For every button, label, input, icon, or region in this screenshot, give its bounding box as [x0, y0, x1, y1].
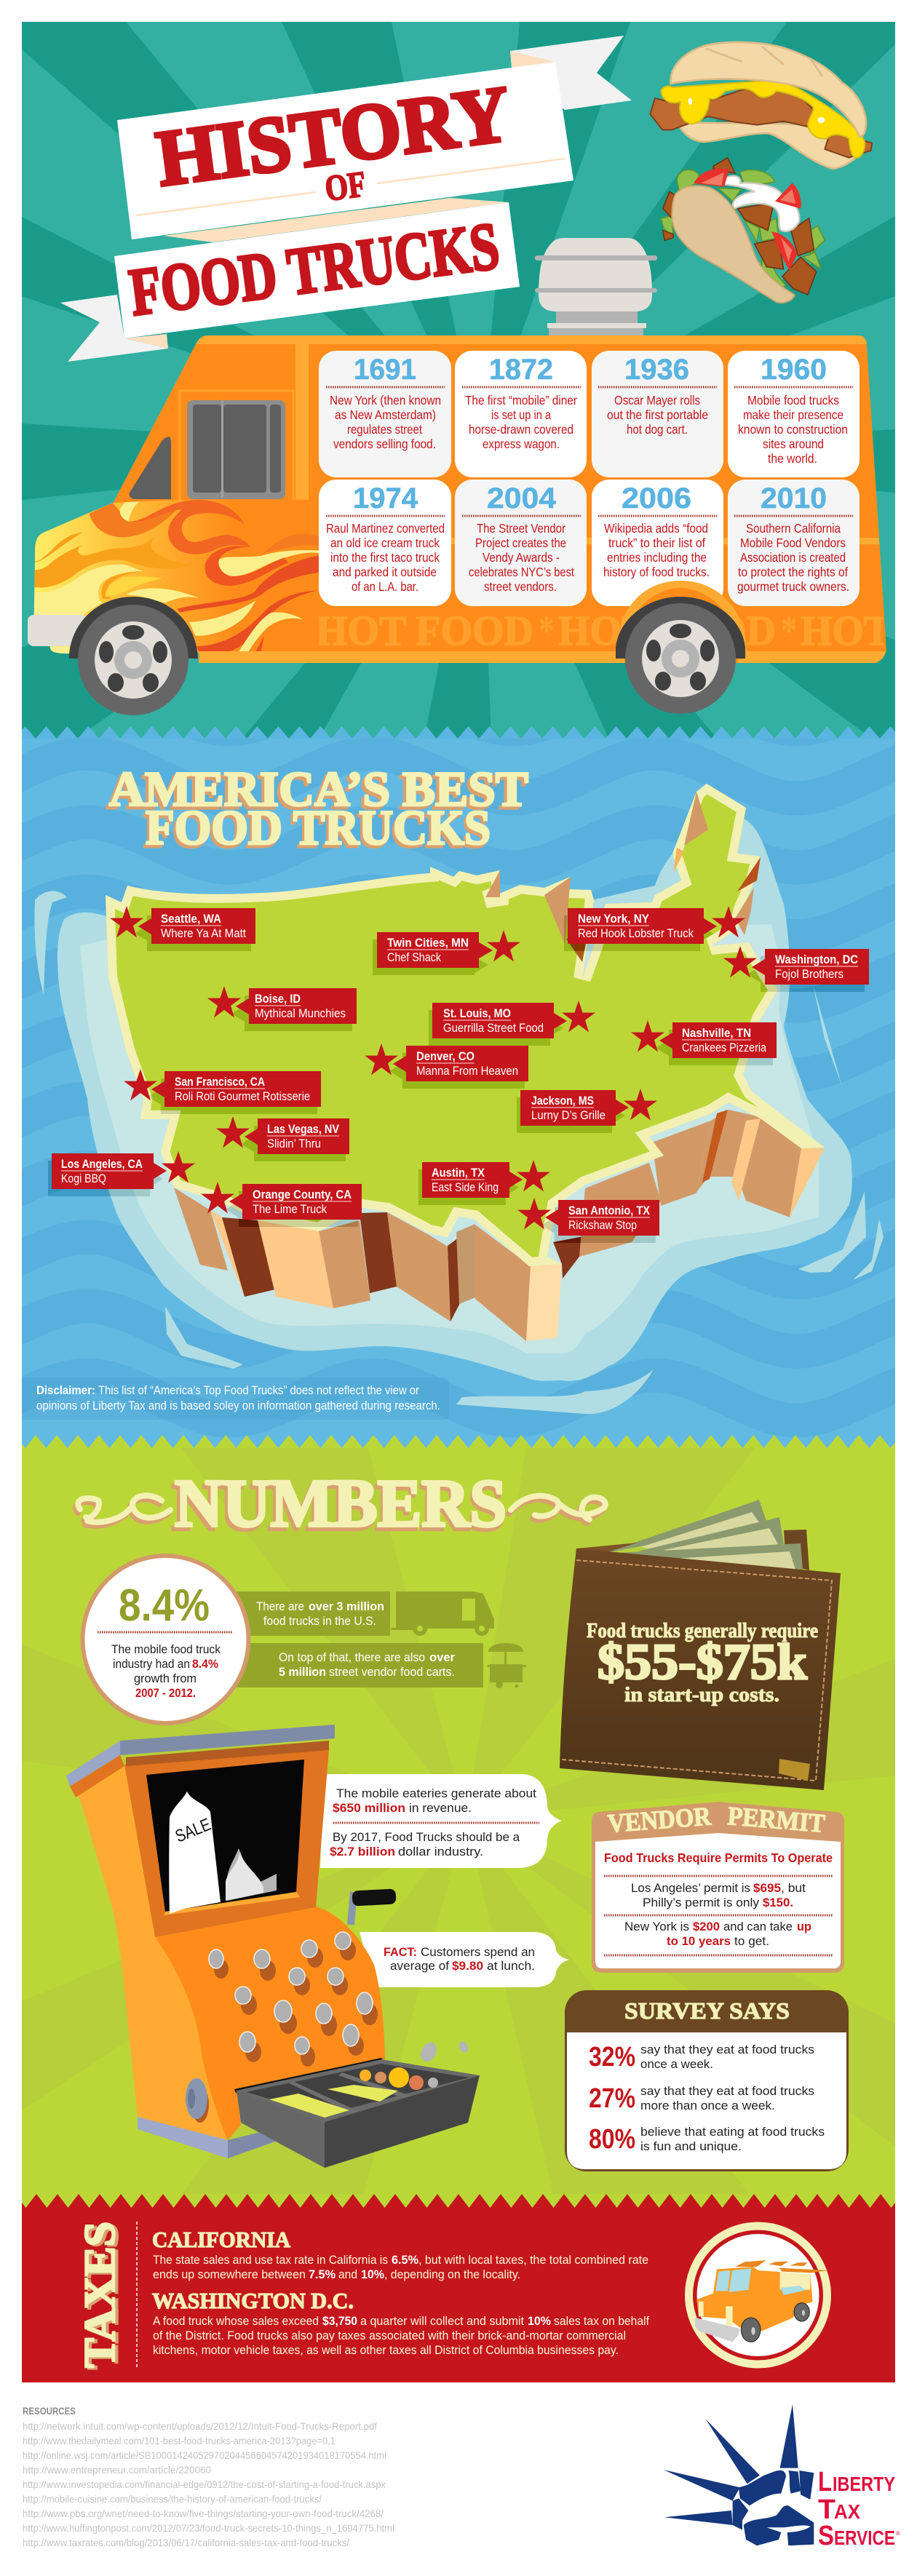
logo: wordmark: ERVICE [834, 2527, 895, 2549]
marker: San Francisco: San Francisco, CA [175, 1075, 265, 1089]
flames [33, 499, 319, 653]
marker: Washington [723, 946, 869, 992]
panel: history section background [22, 22, 895, 739]
marker: Las Vegas: Las Vegas, NV [267, 1122, 340, 1136]
survey stat: 32%: 32% [589, 2042, 635, 2072]
marker: St. Louis [429, 1001, 595, 1046]
timeline card: 1974: and parked it outside [333, 565, 437, 579]
marker: Nashville: Nashville, TN [682, 1026, 751, 1040]
heading: HISTORY: HISTORY [151, 69, 515, 203]
wallet text: in start-up costs. [624, 1683, 779, 1706]
growth circle: industry had an [113, 1658, 190, 1671]
timeline card: 1974: of an L.A. bar. [352, 579, 418, 594]
timeline card: 1872: horse-drawn covered [469, 422, 573, 437]
vendor permit panel: $695 [753, 1882, 781, 1895]
survey stat: 32%: once a week. [640, 2058, 713, 2071]
marker: Denver [365, 1043, 528, 1089]
California tax text: The state sales and use tax rate in California is [153, 2254, 388, 2267]
Washington D.C. tax text: $3,750 [322, 2315, 357, 2328]
survey stat: 80%: believe that eating at food trucks [640, 2126, 825, 2139]
survey stat: 32%: say that they eat at food trucks [640, 2043, 814, 2056]
California tax text: ends up somewhere between [153, 2268, 306, 2281]
register dial [186, 2078, 209, 2123]
icon: truck silhouette [392, 1591, 494, 1636]
marker: Las Vegas [216, 1116, 349, 1161]
speech bubble: revenue: dollar industry. [398, 1845, 483, 1859]
California tax text [152, 2227, 648, 2281]
timeline card: 1936: Oscar Mayer rolls [614, 393, 700, 408]
survey stat: 80%: is fun and unique. [640, 2140, 742, 2153]
marker: Los Angeles [48, 1151, 195, 1196]
timeline card: 2010: Association is created [740, 550, 846, 565]
cash drawer [234, 2058, 480, 2168]
logo: wordmark: T [818, 2494, 835, 2525]
Washington D.C. tax text [152, 2288, 649, 2357]
Washington D.C. tax text: a quarter will collect and submit [360, 2315, 524, 2328]
wallet text: Food trucks generally require [587, 1619, 818, 1642]
heading: America's best food trucks: FOOD TRUCKS [143, 803, 488, 858]
timeline card: 2004: 2004 [487, 482, 557, 514]
logo: wordmark: L [818, 2467, 832, 2497]
truck window [187, 400, 285, 499]
timeline card: 2010: gourmet truck owners. [737, 579, 849, 594]
timeline card: 2010: Mobile Food Vendors [740, 536, 846, 550]
marker: Los Angeles: Kogi BBQ [61, 1172, 106, 1185]
marker: Denver: Denver, CO [416, 1049, 475, 1063]
heading: Taxes: TAXES [79, 2223, 127, 2369]
stat box: food trucks: food trucks in the U.S. [263, 1615, 376, 1628]
title ribbon [60, 36, 632, 362]
marker: Las Vegas: Slidin’ Thru [267, 1137, 321, 1150]
icon: sandwich [650, 42, 872, 169]
timeline card: 1872: 1872 [489, 354, 553, 386]
Washington D.C. tax text: kitchens, motor vehicle taxes, as well as other taxes all District of Columbia businesses pay. [153, 2344, 619, 2357]
crank [351, 1888, 397, 1925]
marker: Austin [418, 1160, 550, 1205]
marker: Orange County: Orange County, CA [253, 1188, 352, 1201]
speech bubble: revenue: The mobile eateries generate about [336, 1787, 536, 1800]
timeline card: 2010: 2010 [761, 482, 827, 514]
Washington D.C. tax text: 10% [528, 2315, 551, 2328]
timeline card: 1960 [728, 351, 860, 477]
marker: San Francisco [124, 1069, 321, 1114]
disclaimer: opinions of Liberty Tax and is based soley on information gathered during research. [36, 1399, 440, 1412]
logo: wordmark [818, 2467, 900, 2551]
California tax text: , but with local taxes, the total combined rate [418, 2254, 648, 2267]
timeline card: 2006: Wikipedia adds “food [604, 521, 708, 536]
timeline card: 2004: street vendors. [484, 579, 557, 594]
timeline card: 1936: out the first portable [607, 408, 708, 422]
logo: Liberty Tax Service [664, 2404, 900, 2551]
speech bubble: lunch fact [360, 1932, 569, 1987]
timeline card: 1936: 1936 [624, 354, 689, 386]
marker: Boise: Mythical Munchies [255, 1006, 346, 1020]
resources: RESOURCES [23, 2405, 76, 2417]
truck bottom strip and arches [69, 581, 886, 663]
heading: Numbers: NUMBERS [175, 1466, 507, 1541]
timeline card: 1974 [319, 480, 451, 606]
marker: San Antonio: Rickshaw Stop [568, 1218, 637, 1232]
timeline card: 2004: Vendy Awards - [483, 550, 560, 565]
coins [417, 2040, 440, 2064]
truck body [35, 335, 886, 663]
timeline card: 1872: The first “mobile” diner [465, 393, 577, 408]
marker: Seattle: Where Ya At Matt [161, 926, 246, 940]
survey stat: 27%: 27% [589, 2083, 635, 2114]
cash register [66, 1725, 480, 2168]
marker: Seattle [110, 906, 255, 951]
vendor permit panel [592, 1801, 844, 1973]
speech bubble: revenue: in revenue. [409, 1802, 472, 1815]
stat box: food carts: 5 million [279, 1666, 326, 1679]
marker: Boise [207, 986, 357, 1031]
timeline card: 1974: into the first taco truck [330, 550, 440, 565]
vendor permit panel: up [797, 1920, 811, 1933]
logo: wordmark: IBERTY [833, 2473, 895, 2495]
marker: Nashville [631, 1020, 777, 1065]
HOT FOOD lettering: * [539, 607, 555, 654]
heading: America's best food trucks: FOOD TRUCKS [146, 800, 491, 855]
disclaimer [22, 1378, 449, 1420]
speech bubble: revenue: $650 million [333, 1802, 405, 1815]
timeline card: 1960: sites around [763, 437, 824, 451]
marker: Boise: Boise, ID [255, 992, 301, 1006]
marker: St. Louis: St. Louis, MO [443, 1006, 511, 1020]
register screen: SALE [172, 1815, 214, 1847]
vendor permit heading [607, 1801, 826, 1838]
survey says panel: SURVEY SAYS [624, 1997, 790, 2024]
heading: OF: OF [322, 163, 368, 209]
timeline card: 2006: 2006 [622, 482, 691, 514]
Washington D.C. tax text: WASHINGTON D.C. [152, 2288, 354, 2313]
stat box: food trucks: over 3 million [309, 1600, 384, 1613]
logo: wordmark: S [818, 2521, 834, 2551]
speech bubble: lunch fact: Customers spend an [421, 1946, 535, 1959]
survey stat: 80% [589, 2124, 825, 2155]
marker: San Antonio: San Antonio, TX [568, 1204, 651, 1217]
timeline card: 1691 [319, 351, 451, 477]
map of the USA [35, 784, 884, 1414]
timeline card: 1974: 1974 [353, 482, 418, 514]
timeline card: 2006 [592, 480, 723, 606]
growth circle: 8.4% [119, 1581, 210, 1631]
stat box: food trucks [237, 1591, 390, 1636]
marker: Twin Cities: Twin Cities, MN [387, 936, 469, 950]
timeline card: 1691: regulates street [347, 422, 422, 437]
logo: wordmark: AX [834, 2500, 860, 2523]
resources: http://www.huffingtonpost.com/2012/07/23/food-truck-secrets-10-things_n_1694775.html [23, 2522, 394, 2534]
survey stat: 27%: say that they eat at food trucks [640, 2085, 814, 2098]
vendor permit panel: to get. [734, 1935, 769, 1948]
marker: Austin: East Side King [432, 1180, 499, 1194]
resources: http://www.taxrates.com/blog/2013/06/17/california-sales-tax-and-food-trucks/ [23, 2537, 349, 2548]
timeline card: 2010: to protect the rights of [738, 565, 848, 579]
register head [124, 1750, 329, 1937]
timeline card: 2004: celebrates NYC’s best [469, 565, 574, 579]
vendor permit heading: PERMIT [726, 1801, 826, 1838]
California tax text: and [338, 2268, 357, 2281]
timeline card: 2006: entries including the [607, 550, 707, 565]
marker: St. Louis: Guerrilla Street Food [443, 1021, 544, 1035]
resources: http://network.intuit.com/wp-content/uploads/2012/12/Intuit-Food-Trucks-Report.pdf [23, 2420, 377, 2432]
register body [155, 1907, 386, 2140]
California tax text: 10% [361, 2268, 384, 2281]
speech bubble: revenue: By 2017, Food Trucks should be a [333, 1831, 520, 1844]
vendor permit panel: , but [781, 1882, 806, 1895]
timeline card: 1960: make their presence [743, 408, 843, 422]
timeline card: 1872: is set up in a [491, 408, 551, 422]
rear wheel [625, 603, 736, 714]
resources: http://www.investopedia.com/financial-edge/0912/the-cost-of-starting-a-food-truck.aspx [23, 2478, 386, 2490]
resources: http://www.pbs.org/wnet/need-to-know/five-things/starting-your-own-food-truck/4268/ [23, 2508, 384, 2519]
heading: Numbers: NUMBERS [172, 1470, 505, 1545]
HOT FOOD lettering [319, 616, 884, 646]
California tax text: , depending on the locality. [384, 2268, 520, 2281]
marker: San Antonio [517, 1198, 659, 1243]
marker: Los Angeles: Los Angeles, CA [61, 1157, 143, 1171]
California tax text: 6.5% [392, 2254, 418, 2267]
resources [23, 2405, 394, 2548]
timeline card: 1691: vendors selling food. [333, 437, 436, 451]
timeline card: 1691: New York (then known [330, 393, 441, 408]
speech bubble: lunch fact: at lunch. [487, 1960, 535, 1973]
shallow water [35, 817, 884, 1414]
growth circle: The mobile food truck [111, 1643, 221, 1656]
timeline card: 1691: 1691 [354, 354, 416, 386]
HOT FOOD lettering: HOT [801, 607, 891, 654]
marker: Jackson [517, 1089, 657, 1133]
survey stat: 80%: 80% [589, 2124, 635, 2155]
vendor permit panel: $200 [693, 1920, 720, 1933]
icon: truck badge [688, 2226, 828, 2364]
timeline card: 1974: an old ice cream truck [330, 536, 440, 550]
timeline card: 1872 [455, 351, 587, 477]
vendor permit panel: $150. [763, 1896, 793, 1909]
stat box: food carts: over [429, 1651, 456, 1664]
heading: FOOD TRUCKS: FOOD TRUCKS [125, 208, 503, 330]
southern cliffs [174, 1110, 825, 1341]
timeline card: 1872: express wagon. [483, 437, 560, 451]
HOT FOOD lettering: * [781, 607, 797, 654]
side mirror [130, 437, 171, 499]
marker: San Francisco: Roli Roti Gourmet Rotisserie [175, 1089, 310, 1103]
marker: New York: New York, NY [578, 912, 650, 926]
timeline card: 1960: 1960 [761, 354, 827, 386]
survey stat: 27%: more than once a week. [640, 2099, 775, 2112]
disclaimer: This list of “America’s Top Food Trucks” does not reflect the view or [98, 1384, 419, 1397]
icon: taco [661, 158, 825, 303]
marker: Nashville: Crankees Pizzeria [682, 1041, 766, 1054]
stat box: food carts: street vendor food carts. [329, 1666, 455, 1679]
food truck [28, 335, 891, 715]
marker: Washington: Fojol Brothers [775, 967, 843, 981]
logo: wordmark: ® [896, 2530, 900, 2537]
speech bubble: revenue: $2.7 billion [330, 1845, 395, 1859]
land [106, 784, 825, 1266]
panel: taxes [22, 2194, 895, 2382]
heading: Numbers [76, 1466, 606, 1545]
timeline card: 2010: Southern California [746, 521, 841, 536]
resources: http://www.thedailymeal.com/101-best-food-trucks-america-2013?page=0,1 [23, 2435, 336, 2446]
marker: New York [564, 906, 745, 951]
growth circle: 2007 - 2012. [135, 1687, 196, 1700]
northern cliffs [485, 792, 761, 962]
timeline card: 1936 [592, 351, 723, 477]
front wheel [78, 605, 188, 715]
speech bubble: lunch fact: average of [390, 1960, 449, 1973]
resources: http://online.wsj.com/article/SB10001424052970204456604574201934018170554.html [23, 2449, 386, 2461]
icon: roof vent [535, 238, 657, 337]
resources: http://www.entrepreneur.com/article/220060 [23, 2464, 211, 2476]
growth circle: 8.4% [192, 1658, 218, 1671]
register base [138, 2116, 275, 2158]
timeline card: 1974: Raul Martinez converted [326, 521, 445, 536]
disclaimer: Disclaimer: [36, 1384, 95, 1397]
speech bubble: lunch fact: FACT: [384, 1946, 417, 1959]
HOT FOOD lettering: HOT FOOD [558, 607, 776, 654]
marker: Twin Cities: Chef Shack [387, 950, 441, 964]
resources: http://mobile-cuisine.com/business/the-history-of-american-food-trucks/ [23, 2493, 322, 2505]
vendor permit heading: VENDOR [607, 1801, 712, 1838]
register keys [209, 1932, 378, 2067]
growth circle: growth from [134, 1672, 196, 1685]
survey says panel [565, 1990, 849, 2171]
register screen [146, 1760, 304, 1915]
stat box: food carts: On top of that, there are also [279, 1651, 425, 1664]
marker: Jackson: Lurny D’s Grille [531, 1108, 606, 1122]
speech bubble: lunch fact: $9.80 [452, 1960, 483, 1973]
timeline card: 2006: history of food trucks. [603, 565, 710, 579]
timeline card: 2006: truck” to their list of [608, 536, 705, 550]
vendor permit panel: New York is [624, 1920, 689, 1933]
marker: Orange County: The Lime Truck [253, 1202, 327, 1216]
wallet [560, 1500, 841, 1790]
stat box: food trucks: There are [256, 1600, 304, 1613]
survey stat: 27% [589, 2083, 814, 2114]
timeline card: 1691: as New Amsterdam) [335, 408, 436, 422]
Washington D.C. tax text: sales tax on behalf [554, 2315, 649, 2328]
marker: Jackson: Jackson, MS [531, 1094, 594, 1108]
vendor permit panel: Food Trucks Require Permits To Operate [604, 1850, 833, 1865]
wallet text: $55-$75k [598, 1634, 807, 1690]
growth circle [83, 1556, 249, 1723]
marker: New York: Red Hook Lobster Truck [578, 926, 694, 940]
timeline card: 1960: known to construction [738, 422, 848, 437]
timeline card: 2004: The Street Vendor [477, 521, 565, 536]
HOT FOOD lettering: HOT FOOD [316, 607, 533, 654]
marker: Orange County [201, 1182, 362, 1227]
California tax text: 7.5% [309, 2268, 336, 2281]
vendor permit panel: Philly’s permit is only [643, 1896, 760, 1909]
vendor permit panel: to 10 years [667, 1935, 731, 1948]
heading: America's best food trucks [106, 761, 528, 858]
vendor permit panel: Los Angeles’ permit is [631, 1882, 750, 1895]
timeline card: 1960: the world. [768, 451, 817, 466]
Washington D.C. tax text: of the District. Food trucks also pay taxes associated with their brick-and-mortar commercial [153, 2329, 626, 2342]
register side [76, 1765, 228, 2140]
panel: america's best food trucks background [22, 726, 895, 1448]
Washington D.C. tax text: A food truck whose sales exceed [153, 2315, 319, 2328]
bumper [28, 615, 87, 646]
timeline card: 2010 [728, 480, 860, 606]
heading: Taxes: TAXES [76, 2222, 124, 2368]
stat box: food carts [237, 1643, 483, 1687]
marker: Austin: Austin, TX [432, 1166, 485, 1180]
timeline card: 1960: Mobile food trucks [747, 393, 839, 408]
marker: Twin Cities [373, 930, 520, 975]
heading: America's best food trucks: AMERICA’S BEST [109, 761, 528, 816]
speech bubble: revenue [320, 1774, 562, 1868]
heading: America's best food trucks: AMERICA’S BEST [106, 764, 525, 819]
logo: torch crown [664, 2404, 814, 2545]
vendor permit panel: and can take [723, 1920, 793, 1933]
icon: food cart [488, 1643, 526, 1688]
marker: Denver: Manna From Heaven [416, 1064, 518, 1078]
timeline card: 1936: hot dog cart. [627, 422, 688, 437]
wallet text [587, 1619, 818, 1706]
California tax text: CALIFORNIA [152, 2227, 291, 2252]
timeline card: 2004 [455, 480, 587, 606]
marker: Seattle: Seattle, WA [161, 912, 221, 926]
icon: sandwich and taco [650, 42, 872, 303]
marker: Washington: Washington, DC [775, 953, 858, 966]
timeline card: 2004: Project creates the [475, 536, 566, 550]
panel: numbers section background [22, 1435, 895, 2208]
survey stat: 32% [589, 2042, 814, 2072]
